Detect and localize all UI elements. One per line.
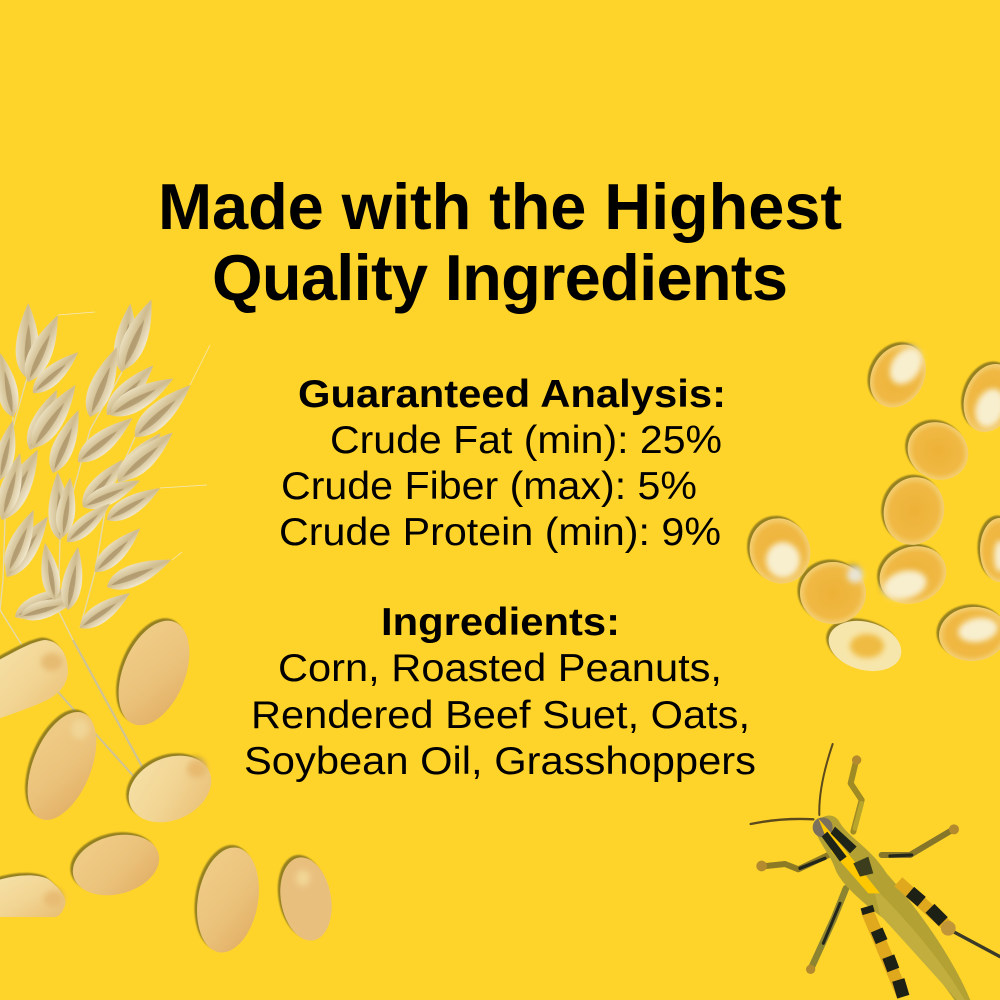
icon: oat sprig bbox=[0, 295, 210, 780]
text block: ingredients bbox=[244, 601, 756, 783]
text block: ingredients: Ingredients: bbox=[381, 601, 620, 644]
peanut: bottom right bbox=[274, 853, 338, 945]
icon: corn kernels bbox=[741, 334, 1000, 679]
text block: guaranteed analysis: Crude Protein (min): 9% bbox=[279, 511, 721, 554]
legs bbox=[756, 755, 1000, 974]
kernel 6 bbox=[741, 510, 819, 592]
icon: grasshopper bbox=[751, 744, 1000, 1000]
title: Made with the Highest bbox=[158, 170, 842, 243]
peanut: lower bbox=[66, 826, 166, 904]
title: Quality Ingredients bbox=[212, 241, 788, 314]
kernel 7 bbox=[800, 562, 866, 624]
text block: ingredients: Soybean Oil, Grasshoppers bbox=[244, 740, 756, 783]
icon: peanuts bbox=[0, 610, 338, 957]
peanut: cut, right bbox=[118, 743, 222, 835]
peanut: lower left edge bbox=[0, 875, 65, 917]
kernel 1 bbox=[859, 334, 937, 418]
text block: guaranteed analysis: Guaranteed Analysis: bbox=[298, 373, 726, 416]
title bbox=[158, 170, 842, 314]
text block: guaranteed analysis: Crude Fat (min): 25% bbox=[330, 419, 722, 462]
kernel 9 bbox=[980, 518, 1000, 582]
wings and body bbox=[815, 815, 972, 1000]
kernel 4 bbox=[876, 470, 952, 552]
kernel 8 bbox=[823, 613, 907, 679]
head and stripes bbox=[813, 817, 833, 837]
peanut: bottom centre bbox=[189, 843, 267, 957]
peanut: cut, left edge bbox=[0, 640, 68, 720]
text block: ingredients: Corn, Roasted Peanuts, bbox=[278, 647, 722, 690]
peanut: middle bbox=[14, 702, 110, 830]
peanut: upper right bbox=[105, 610, 203, 736]
kernel 10 bbox=[937, 604, 1000, 664]
text block: guaranteed analysis bbox=[279, 373, 726, 554]
hind legs bbox=[867, 882, 956, 997]
antennae bbox=[751, 744, 833, 824]
kernel 2 bbox=[955, 357, 1000, 439]
text block: ingredients: Rendered Beef Suet, Oats, bbox=[251, 694, 750, 737]
text block: guaranteed analysis: Crude Fiber (max): 5% bbox=[281, 465, 697, 508]
kernel 5 bbox=[871, 537, 955, 613]
kernel 3 bbox=[897, 411, 979, 491]
